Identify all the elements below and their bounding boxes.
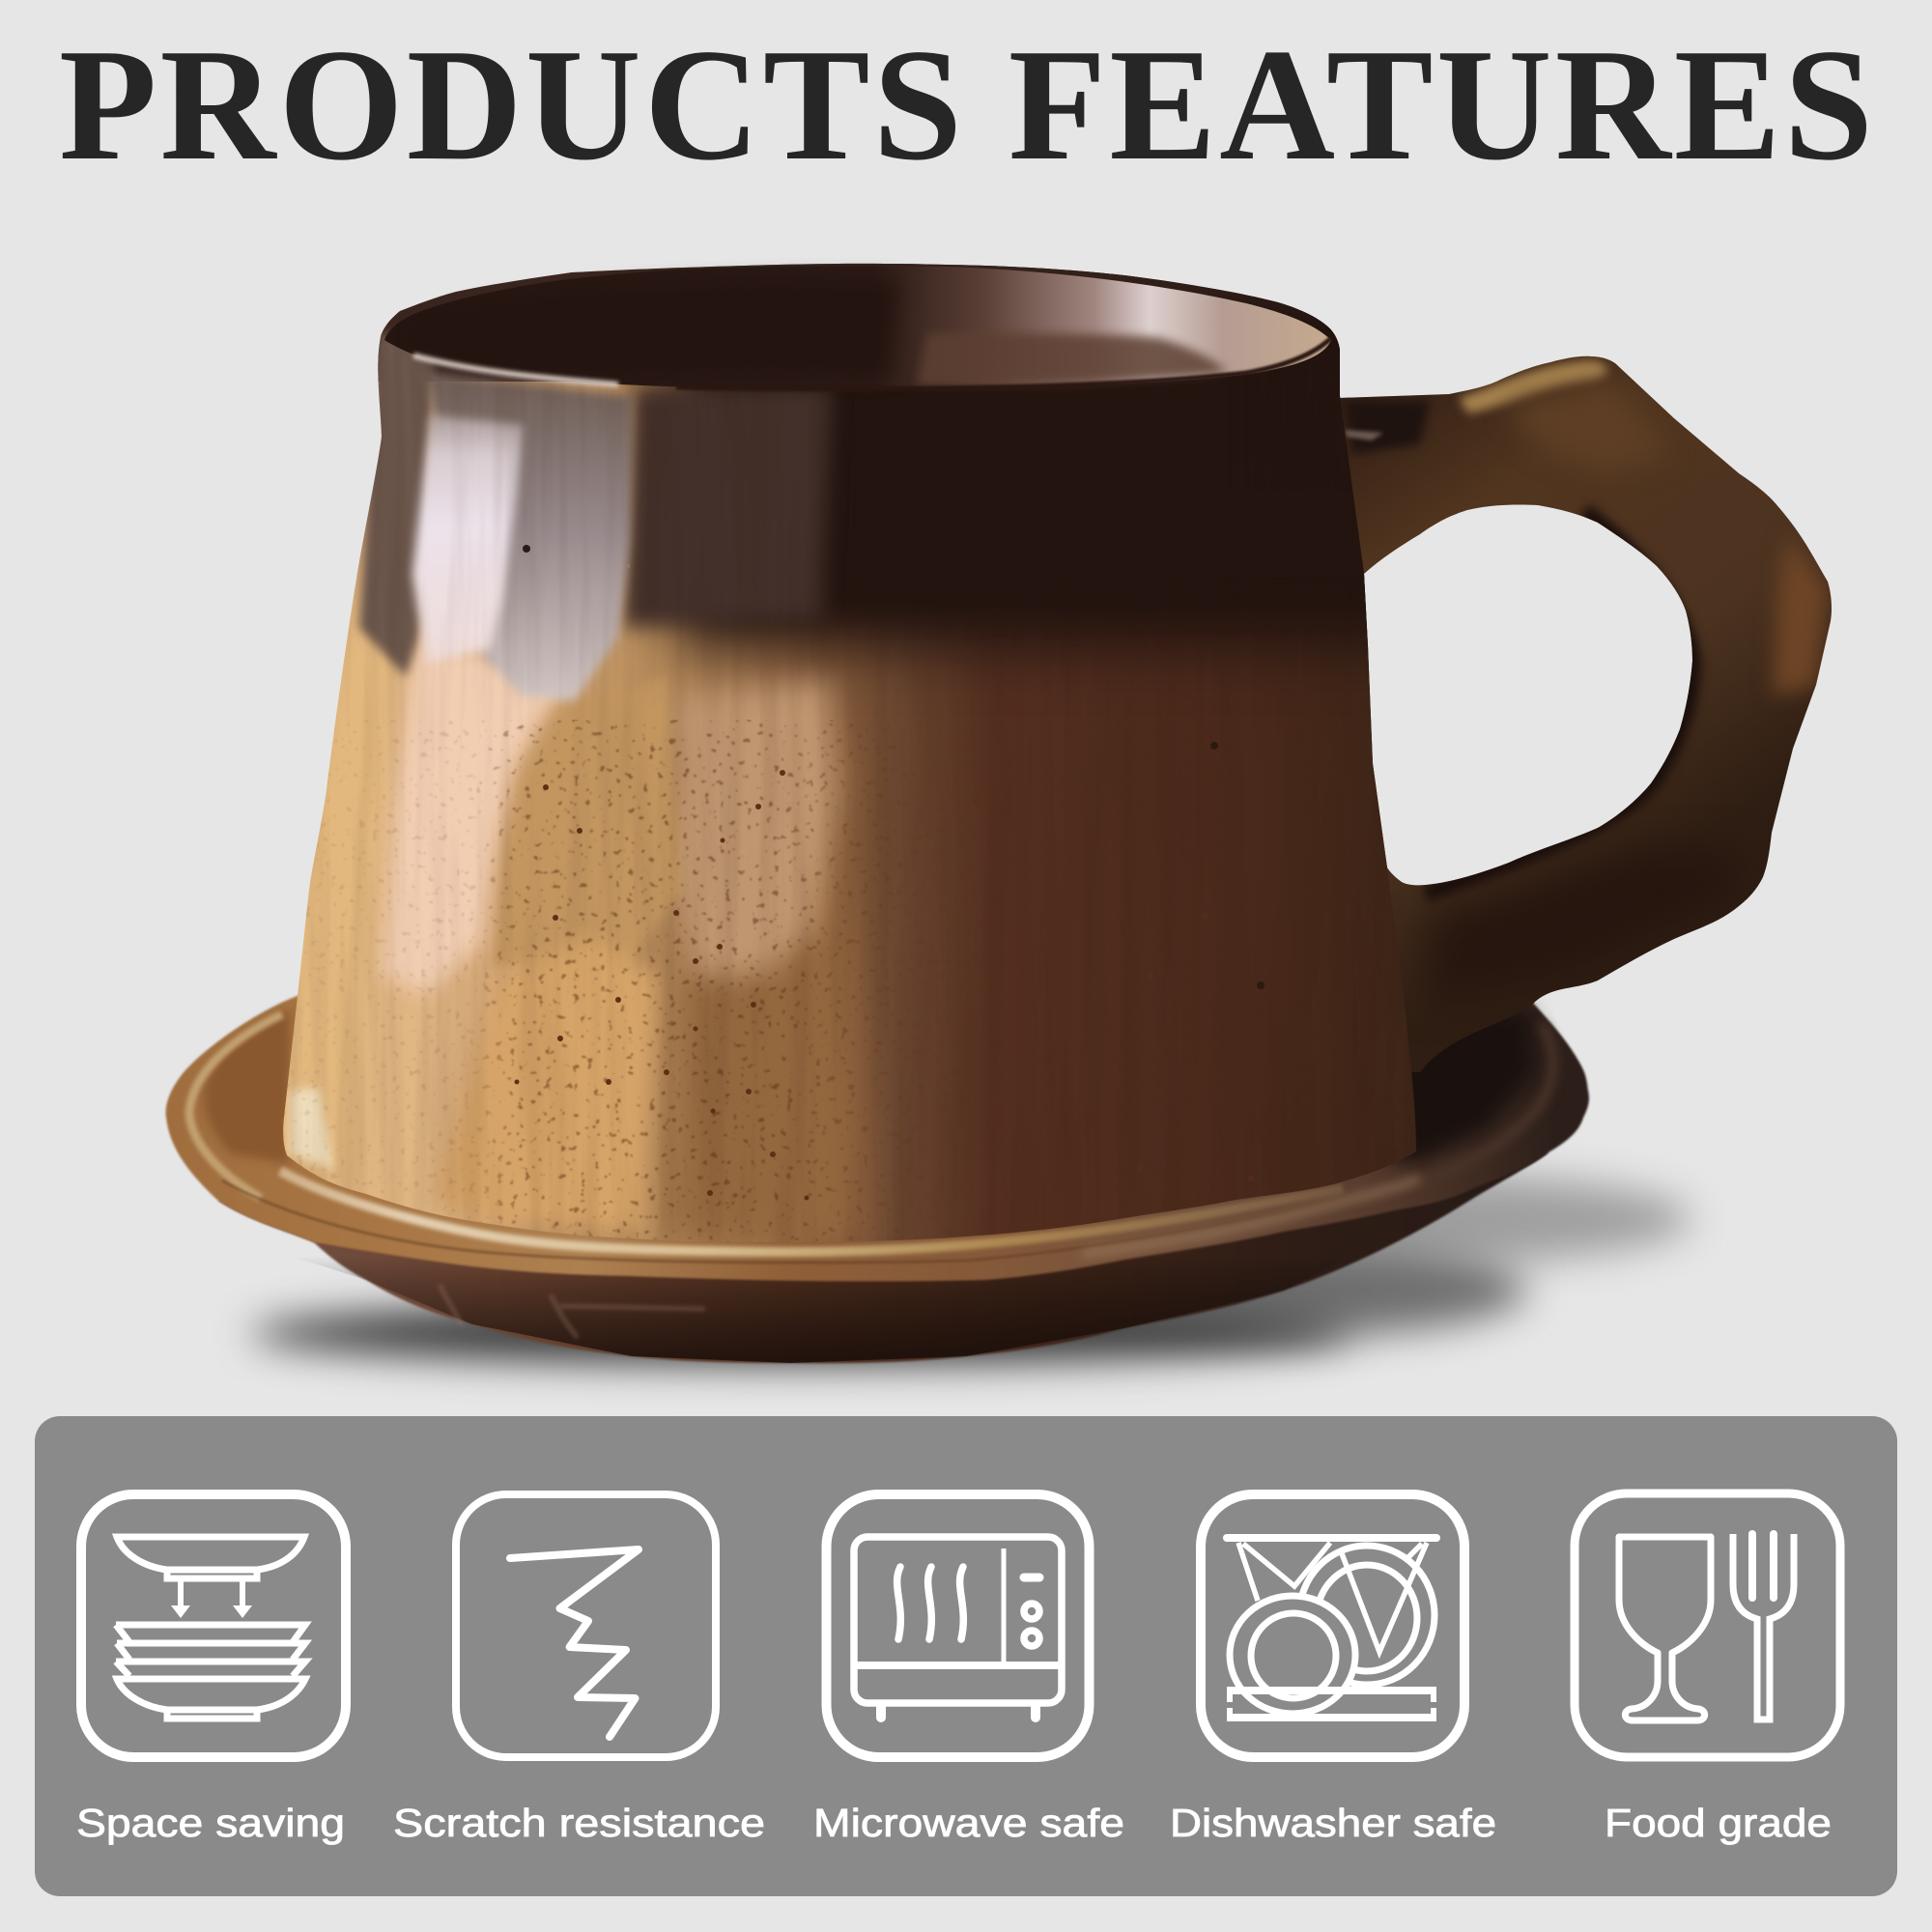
- icon: dishwasher rack: [1201, 1494, 1464, 1757]
- left grey strip: [359, 333, 435, 676]
- dark glaze band: [676, 290, 1488, 647]
- feature: microwave safe: [813, 1494, 1124, 1845]
- icon: stacking plates: [81, 1494, 346, 1757]
- body left yellow edge: [283, 639, 348, 1157]
- handle outer orange edge: [1773, 536, 1828, 696]
- icon: glass and fork: [1575, 1493, 1840, 1757]
- rim glint: [280, 1171, 1343, 1252]
- saucer underside: [218, 1111, 1548, 1363]
- feature panel: [35, 1416, 1897, 1896]
- rim highlight: [413, 355, 618, 384]
- body lower left pale: [290, 1087, 333, 1169]
- mug body: [270, 251, 1488, 1256]
- saucer shadow: [251, 1175, 1690, 1364]
- body explicit dark specks: [514, 545, 1264, 1200]
- feature: dishwasher safe: [1170, 1494, 1496, 1845]
- label: Food grade: Food grade: [1605, 1801, 1832, 1845]
- saucer left inner wall: [204, 1009, 290, 1164]
- body vertical streaks: [291, 421, 840, 1240]
- white glaze highlight: [412, 415, 523, 663]
- product photo: mug and saucer: [166, 251, 1835, 1364]
- handle top highlight: [1459, 360, 1607, 413]
- feature: space saving: [76, 1494, 346, 1845]
- body speckles: [284, 720, 885, 1242]
- dark glaze left lighter zone: [623, 386, 831, 628]
- saucer rim: [166, 966, 1589, 1281]
- body pale facet: [671, 676, 840, 976]
- interior dark rear wall: [415, 280, 898, 377]
- mug interior: [384, 266, 1331, 389]
- icon: microwave: [827, 1494, 1090, 1757]
- mug rim back: [378, 263, 1340, 382]
- label: Space saving: Space saving: [76, 1801, 345, 1845]
- mauve glaze: [425, 372, 633, 700]
- label: Microwave safe: Microwave safe: [813, 1801, 1124, 1845]
- body pale pink highlight: [382, 638, 570, 995]
- icon: scratch mark: [456, 1494, 716, 1757]
- saucer: [166, 966, 1589, 1363]
- saucer underside swirl: [440, 1285, 705, 1338]
- body right facet lower: [653, 846, 868, 1242]
- body yellow patch: [435, 937, 657, 1232]
- handle inner shadow: [1426, 512, 1692, 894]
- handle: [1340, 355, 1832, 1072]
- label: Dishwasher safe: Dishwasher safe: [1170, 1801, 1496, 1845]
- feature: scratch resistance: [393, 1494, 765, 1845]
- saucer dark inner right: [1381, 1005, 1536, 1164]
- title: PRODUCTS FEATURES: [59, 15, 1873, 193]
- body tan patch: [493, 676, 681, 966]
- interior floor shade: [918, 333, 1227, 384]
- label: Scratch resistance: Scratch resistance: [393, 1801, 765, 1845]
- feature: food grade: [1575, 1493, 1840, 1845]
